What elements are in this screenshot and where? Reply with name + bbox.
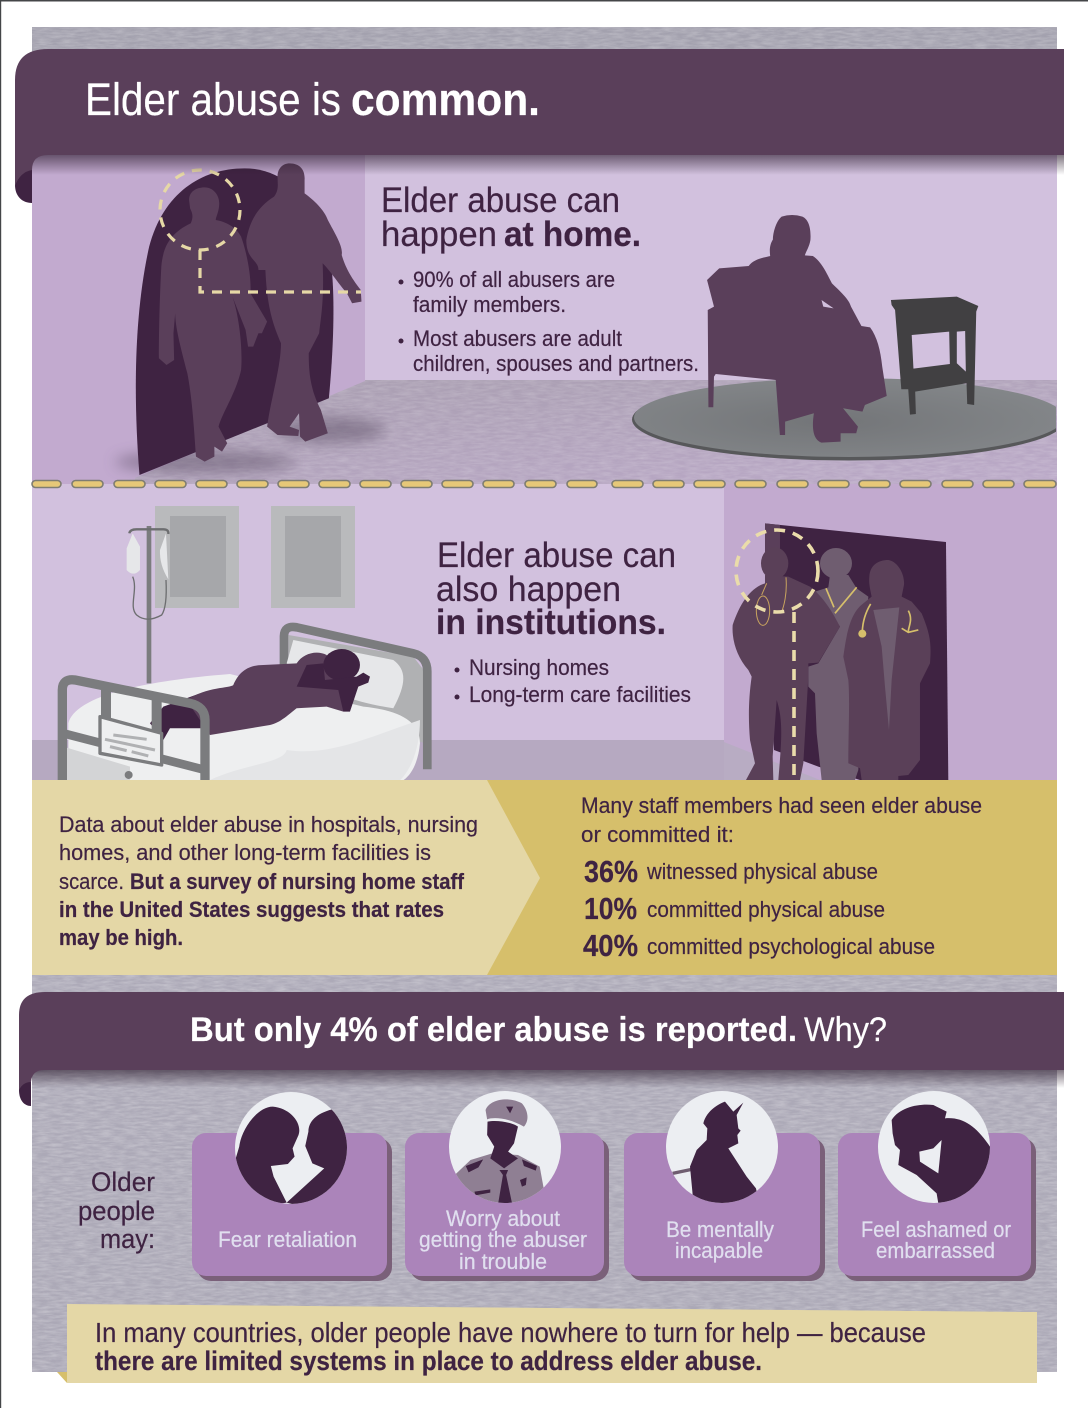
card: mentally incapable: incapable <box>675 1238 763 1263</box>
card: mentally incapable: Be mentally <box>666 1217 774 1242</box>
nurse <box>808 548 868 780</box>
arrow panel <box>32 780 540 975</box>
doctor <box>843 560 931 780</box>
bullet list: at home: children, spouses and partners. <box>413 351 699 376</box>
panel: abuse at home <box>32 155 1066 484</box>
survey text: in the United States suggests that rates <box>59 897 444 922</box>
banner curl <box>19 1074 31 1106</box>
staff statistics: 10% <box>584 891 637 926</box>
staff statistics <box>581 793 982 963</box>
banner text: Why? <box>804 1011 887 1049</box>
right wall <box>724 484 1057 780</box>
staff statistics: 36% <box>584 854 638 889</box>
banner curl <box>15 160 32 203</box>
staff statistics: committed psychological abuse <box>647 934 935 959</box>
heading: at home: Elder abuse can <box>381 181 620 220</box>
survey text <box>59 812 478 950</box>
doorway <box>136 168 333 475</box>
callout: limited systems <box>57 1304 1037 1383</box>
floor <box>32 740 820 780</box>
lead-in label: Older <box>91 1167 155 1197</box>
lead-in label: may: <box>100 1224 155 1254</box>
gold background <box>480 780 1057 975</box>
heading: institutions: Elder abuse can <box>437 536 676 575</box>
survey text: homes, and other long-term facilities is <box>59 840 431 865</box>
woman in chair <box>707 215 887 443</box>
banner text: But only 4% of elder abuse is reported. <box>190 1011 797 1049</box>
bullet list: institutions: Nursing homes <box>469 655 609 680</box>
floor shadows <box>115 417 385 473</box>
icon: uniformed officer <box>456 1099 544 1203</box>
abuser and older person silhouettes <box>159 163 361 462</box>
card: ashamed or embarrassed: Feel ashamed or <box>861 1217 1011 1242</box>
card: ashamed or embarrassed <box>838 1091 1036 1281</box>
bullet list: at home: family members. <box>413 292 566 317</box>
banner shadow <box>32 155 1064 175</box>
card: mentally incapable <box>624 1091 825 1281</box>
lead-in label: people <box>78 1196 155 1226</box>
back wall <box>365 155 1057 381</box>
bullet list: institutions: Long-term care facilities <box>469 682 691 707</box>
male staff member <box>733 547 840 780</box>
card: worry about abuser: getting the abuser <box>419 1227 587 1252</box>
icon: older man in wheelchair <box>673 1102 757 1208</box>
bullet list: at home <box>398 267 699 376</box>
survey text: Data about elder abuse in hospitals, nursing <box>59 812 478 837</box>
card: ashamed or embarrassed: embarrassed <box>876 1238 995 1263</box>
title text <box>85 74 540 125</box>
staff statistics: committed physical abuse <box>647 897 885 922</box>
staff statistics: 40% <box>583 928 638 963</box>
bullet list: at home: 90% of all abusers are <box>413 267 615 292</box>
side table <box>891 297 978 415</box>
card: worry about abuser <box>405 1091 609 1281</box>
card: worry about abuser: Worry about <box>446 1206 560 1231</box>
dashed divider between panels <box>32 480 1056 488</box>
card: worry about abuser: in trouble <box>459 1249 547 1274</box>
windows <box>155 506 355 608</box>
staff statistics: Many staff members had seen elder abuse <box>581 793 982 818</box>
heading: at home: at home. <box>504 215 641 254</box>
title banner <box>15 49 1064 203</box>
survey text: may be high. <box>59 925 183 950</box>
title text: common. <box>351 74 540 125</box>
dashed highlight on staff member <box>736 530 818 780</box>
banner shadow <box>32 1070 1064 1088</box>
staff silhouettes <box>733 547 931 780</box>
survey text: scarce. <box>59 869 124 894</box>
heading: institutions: in institutions. <box>436 603 666 642</box>
icon: bowed head <box>892 1105 993 1207</box>
reporting banner <box>19 992 1064 1106</box>
dark doorway behind staff <box>765 523 948 780</box>
bullet list: at home: Most abusers are adult <box>413 326 622 351</box>
dashed highlight on older person <box>160 170 361 292</box>
survey text: But a survey of nursing home staff <box>130 869 465 894</box>
callout: limited systems: there are limited systems in place to address elder abuse. <box>95 1346 762 1376</box>
floor <box>32 380 1057 484</box>
bullet list: institutions <box>454 655 691 707</box>
heading: at home <box>381 181 641 254</box>
callout: limited systems: In many countries, older people have nowhere to turn for help — because <box>95 1317 926 1348</box>
rug <box>632 378 1066 460</box>
staff statistics: witnessed physical abuse <box>646 859 878 884</box>
stethoscopes <box>756 577 918 632</box>
icon: two faces in profile <box>236 1106 347 1204</box>
staff statistics: or committed it: <box>581 822 734 847</box>
heading: institutions: also happen <box>436 570 621 609</box>
card: fear retaliation <box>192 1092 392 1281</box>
panel: abuse in institutions <box>32 484 1057 783</box>
heading: at home: happen <box>381 215 497 254</box>
banner body <box>15 49 1064 186</box>
side wall <box>32 155 365 484</box>
card: fear retaliation: Fear retaliation <box>218 1227 357 1252</box>
left wall <box>32 484 724 780</box>
heading: institutions <box>436 536 676 642</box>
hospital bed with patient and IV <box>62 526 427 783</box>
banner body <box>19 992 1064 1090</box>
panel: survey data <box>32 780 1057 975</box>
title text: Elder abuse is <box>85 74 341 125</box>
lead-in label <box>78 1167 155 1254</box>
